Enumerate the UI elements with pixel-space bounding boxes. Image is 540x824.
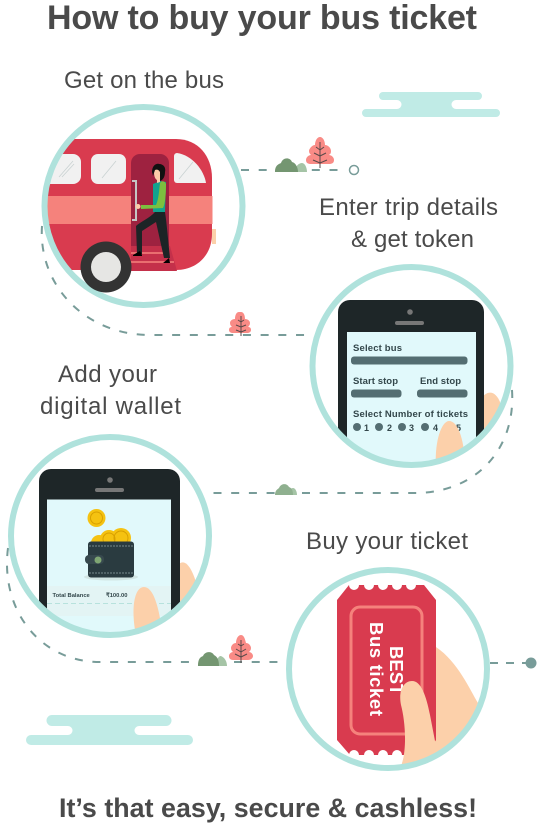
heading: buy your ticket: Buy your ticket [306, 528, 468, 555]
form fields: 3 [409, 423, 414, 433]
icon: bush 1 [275, 158, 307, 172]
ticket text: Bus ticket [366, 622, 387, 716]
balance row [47, 592, 171, 604]
dashed path: finish [490, 658, 536, 668]
dashed path: step 1 to step 2 [42, 226, 312, 335]
icon: bush 2 [275, 484, 297, 495]
heading: enter trip details: Enter trip details [319, 194, 498, 221]
figure: woman boarding [133, 164, 170, 263]
ring [11, 437, 209, 635]
dashed path: step 2 to step 3 [205, 390, 512, 493]
wheel [80, 242, 132, 292]
heading: add your digital wallet [40, 361, 181, 420]
form fields: 5 [456, 423, 461, 433]
thumb [436, 421, 464, 459]
ring [289, 570, 487, 768]
panel: step 4 ticket [289, 570, 487, 770]
heading: get on the bus: Get on the bus [64, 67, 224, 94]
wallet [84, 542, 138, 580]
hand [484, 392, 500, 429]
ticket text [370, 623, 403, 716]
panel: step 3 wallet [11, 437, 209, 650]
icon: tree 1 [306, 137, 334, 168]
form fields: End stop [420, 376, 461, 387]
heading: enter trip details: & get token [351, 226, 474, 253]
phone body [39, 469, 180, 610]
ring [312, 267, 510, 465]
form fields: 4 [433, 423, 438, 433]
icon: tree 3 [229, 635, 253, 663]
ticket text: BEST [386, 646, 407, 696]
heading: add your digital wallet: Add your [58, 361, 157, 388]
phone body [338, 300, 484, 437]
thumb [134, 587, 160, 629]
hand [400, 647, 478, 770]
panel: step 1 bus [40, 107, 242, 305]
hand [180, 562, 196, 602]
cloud: top right [362, 92, 500, 117]
illustration: bus [40, 139, 216, 271]
door [131, 154, 169, 246]
form fields: 1 [364, 423, 369, 433]
ring [44, 107, 242, 305]
dashed path: step 1 to end node [241, 166, 358, 174]
heading: add your digital wallet: digital wallet [40, 393, 181, 420]
title: How to buy your bus ticket [47, 0, 477, 37]
cloud: bottom left [26, 715, 193, 745]
form fields: 2 [387, 423, 392, 433]
balance row: Total Balance [52, 593, 91, 599]
form fields [351, 343, 468, 433]
icon: bush 3 [198, 652, 227, 666]
balance row: ₹100.00 [106, 592, 127, 599]
form fields: Start stop [353, 376, 398, 387]
ticket [337, 585, 436, 755]
coins [88, 509, 131, 542]
dashed path: step 3 to step 4 [7, 548, 288, 662]
heading: enter trip details [319, 194, 498, 253]
windows [40, 153, 206, 184]
tagline: It’s that easy, secure & cashless! [59, 793, 477, 823]
panel: step 2 phone [312, 267, 510, 482]
form fields: Select Number of tickets [353, 409, 468, 420]
icon: tree 2 [229, 312, 251, 336]
form fields: Select bus [353, 343, 402, 354]
thumb [400, 681, 435, 761]
